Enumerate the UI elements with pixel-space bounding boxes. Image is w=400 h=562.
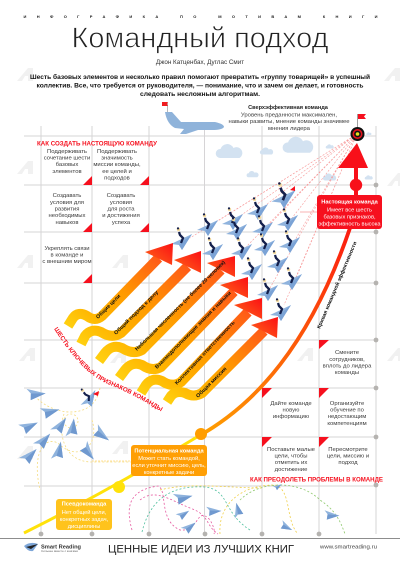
advice: build the team: Поддерживать: [97, 149, 137, 155]
super-effective team text: Сверхэффективная команда: [248, 104, 329, 111]
advice: build the team: ее целей и: [102, 168, 132, 175]
logo: Smart Reading: [41, 544, 82, 550]
grid: [24, 126, 376, 534]
advice: build the team: [42, 149, 141, 265]
arrow: small size: [99, 256, 235, 361]
advice: overcome problems: Дайте команде: [270, 400, 312, 407]
heading: how to create: КАК СОЗДАТЬ НАСТОЯЩУЮ КОМАНДУ: [37, 140, 157, 148]
side heading: six key signs: ШЕСТЬ КЛЮЧЕВЫХ ПРИЗНАКОВ КОМАНДЫ: [54, 326, 163, 412]
yellow dashed trails left: [33, 388, 131, 490]
advice: build the team: Поддерживать: [47, 149, 87, 155]
leader plane left: [75, 384, 100, 410]
box: potential team: [92, 445, 207, 476]
advice: build the team: необходимых: [49, 213, 86, 219]
advice: build the team: базовых: [56, 162, 78, 168]
advice: overcome problems: обучение по: [330, 408, 365, 414]
advice: overcome problems: Организуйте: [330, 400, 365, 407]
logo: Сильнее вместе с книгами: [41, 549, 78, 553]
box: pseudo team: [56, 499, 112, 530]
super-effective team text: Уровень преданности максимален,: [241, 112, 337, 118]
super-effective team text: навыки развиты, мнение команды значимее: [228, 119, 350, 125]
advice: build the team: условия: [110, 200, 132, 206]
arrow: collective responsibility: Коллективная ответственность: [174, 320, 236, 386]
advice: build the team: элементов: [52, 169, 82, 175]
red corner markers: [83, 176, 329, 447]
leader plane with red flag: [271, 182, 296, 208]
heading: overcome problems: КАК ПРЕОДОЛЕТЬ ПРОБЛЕМЫ В КОМАНДЕ: [250, 476, 383, 484]
header label: ИНФОГРАФИКА ПО МОТИВАМ КНИГИ: [24, 14, 378, 19]
authors: Джон Катценбах, Дуглас Смит: [156, 58, 244, 66]
advice: overcome problems: информацию: [273, 414, 310, 420]
box: pseudo team: дисциплины: [68, 524, 100, 530]
logo: [24, 543, 82, 553]
advice: overcome problems: новую: [283, 408, 300, 414]
dashed lines to target: [190, 134, 357, 305]
box: potential team: если уточнит миссию, цель,: [132, 463, 206, 469]
advice: overcome problems: команды: [335, 370, 359, 376]
arrow: common goals: [68, 243, 173, 326]
advice: overcome problems: отметить их: [275, 460, 307, 466]
box: real team: Настоящая команда: [321, 200, 379, 206]
advice: build the team: для роста: [107, 206, 135, 212]
advice: overcome problems: сотрудников,: [329, 357, 365, 363]
arrow: common goals: Общие цели: [94, 293, 122, 320]
advice: build the team: значимость: [101, 156, 133, 162]
intro text: [30, 73, 370, 98]
advice: build the team: Создавать: [53, 193, 81, 199]
advice: overcome problems: Пересмотрите: [328, 447, 368, 453]
super-effective team text: [228, 104, 350, 132]
scattered planes: [17, 384, 109, 466]
advice: build the team: миссии команды,: [93, 162, 141, 168]
intro text: следовать несложным алгоритмам.: [140, 91, 260, 98]
advice: build the team: навыков: [56, 220, 78, 226]
box: potential team: конкретные задачи: [144, 470, 194, 476]
advice: overcome problems: достижение: [275, 467, 308, 473]
arrow: complementary skills: [119, 277, 248, 378]
airplane with flag: [162, 102, 224, 134]
box: potential team: Потенциальная команда: [134, 448, 204, 454]
box: real team: базовых признаков,: [323, 214, 376, 220]
advice: overcome problems: вплоть до лидера: [323, 364, 372, 370]
arrow: common mission: Общая миссия: [194, 365, 228, 399]
advice: build the team: Укреплять связи: [44, 246, 90, 252]
advice: build the team: условия для: [50, 200, 84, 206]
website: www.smartreading.ru: [319, 544, 377, 550]
advice: overcome problems: Поставьте малые: [267, 447, 316, 453]
arrow: common mission: [167, 317, 278, 402]
arrow: small size: Небольшая численность (не более 20 человек): [133, 259, 227, 352]
intro text: Шесть базовых элементов и несколько правил помогают превратить «группу товарищей» в успешный: [30, 73, 370, 81]
advice: build the team: успеха: [112, 220, 131, 226]
title: Командный подход: [72, 22, 329, 54]
advice: overcome problems: цели, чтобы: [275, 454, 307, 460]
super-effective team text: мнения лидера: [268, 126, 311, 132]
advice: overcome problems: Смените: [335, 350, 360, 356]
arrow: collective responsibility: [141, 298, 262, 393]
box: real team: [300, 195, 382, 229]
box: pseudo team: Нет общей цели,: [62, 509, 107, 516]
paper planes: team flying to target: [171, 197, 302, 321]
arrow: common approach: [81, 251, 201, 344]
advice: overcome problems: подход: [338, 460, 358, 466]
advice: build the team: и достижения: [102, 213, 140, 219]
box: pseudo team: Псевдокоманда: [62, 502, 107, 508]
tangled dashed paths bottom: [129, 484, 345, 535]
curve label: Кривая командной эффективности: [315, 241, 359, 330]
intro text: коллектив. Все, что требуется от руководителя, — понимание, что и зачем он делает, и готовность: [36, 82, 364, 90]
advice: build the team: с внешним миром: [42, 259, 92, 265]
advice: build the team: в команде и: [51, 252, 83, 258]
footer rule: [0, 538, 400, 540]
advice: overcome problems: недостающим: [328, 414, 366, 420]
advice: build the team: подходов: [104, 176, 130, 182]
clouds: [216, 132, 373, 180]
box: pseudo team: конкретных задач,: [60, 517, 109, 523]
box: real team: Имеет все шесть: [327, 208, 372, 214]
advice: build the team: развития: [55, 206, 79, 212]
footer slogan: ЦЕННЫЕ ИДЕИ ИЗ ЛУЧШИХ КНИГ: [108, 544, 294, 556]
advice: build the team: сочетание шести: [44, 156, 90, 162]
arrow: complementary skills: Взаимодополняющие знания и навыки: [154, 291, 233, 370]
advice: build the team: Создавать: [107, 193, 135, 199]
arrow: common approach: Общий подход к делу: [112, 289, 160, 336]
target with flag: [350, 114, 366, 141]
advice: overcome problems: компетенциям: [327, 421, 367, 427]
effectiveness curve: [24, 143, 368, 533]
advice: overcome problems: цели, миссию и: [327, 454, 369, 460]
advice: overcome problems: [267, 350, 372, 473]
box: real team: эффективность высока: [318, 222, 381, 228]
box: potential team: Может стать командой,: [138, 455, 200, 462]
